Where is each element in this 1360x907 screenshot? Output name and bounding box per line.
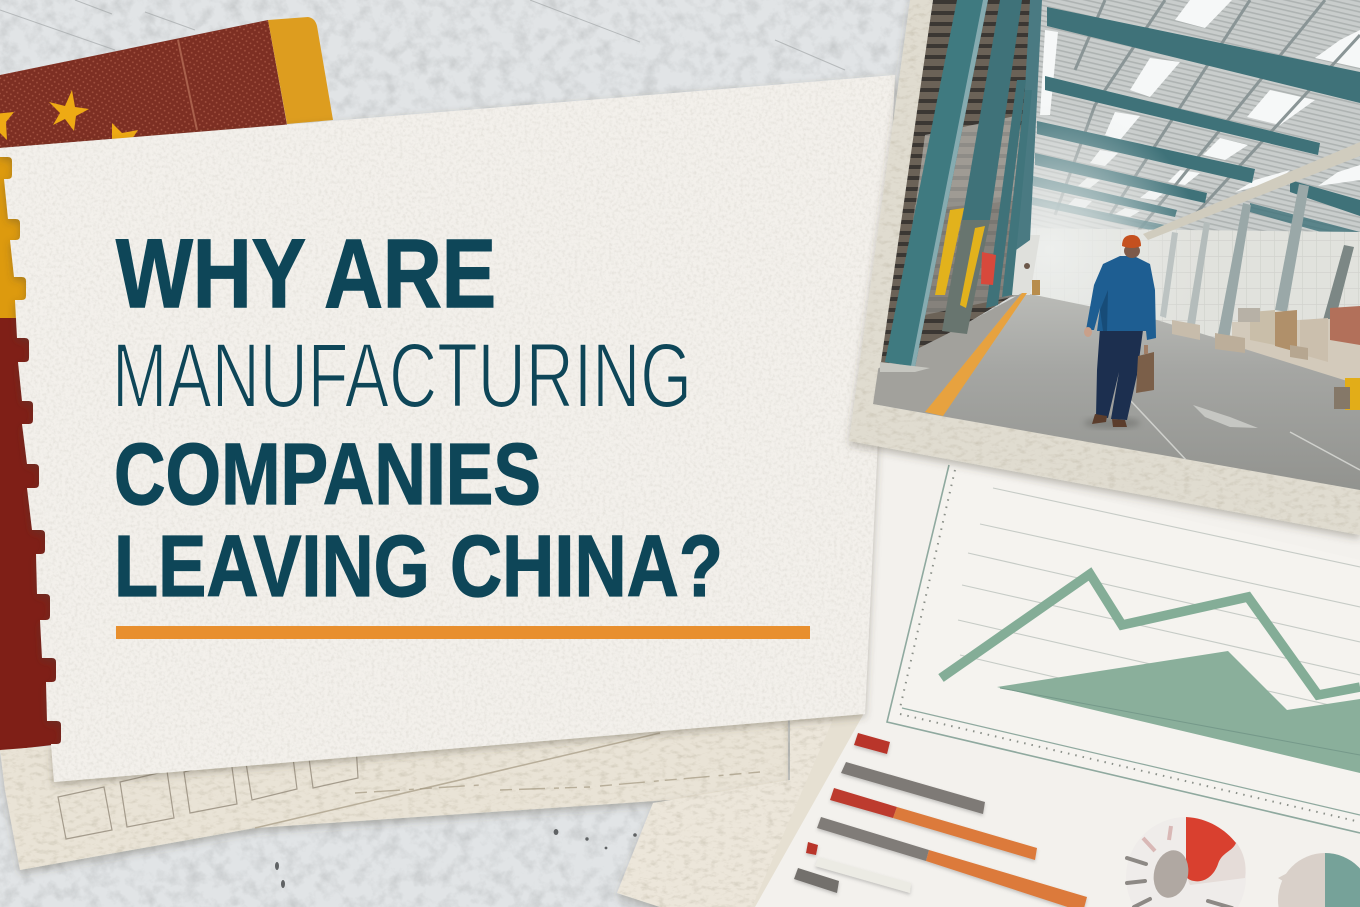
title line: manufacturing: MANUFACTURING (112, 325, 692, 427)
envelope paper under the main sheet (0, 690, 788, 870)
photo pallets and crates (1172, 306, 1360, 410)
title line: leaving china: LEAVING CHINA? (114, 518, 723, 615)
accent rule under title (116, 626, 810, 639)
photo: factory with a man walking, in a print frame (849, 0, 1360, 535)
photo ceiling (930, 0, 1360, 340)
icon: book spine band (268, 17, 333, 124)
title line: why are: WHY ARE (116, 219, 496, 328)
photo long cream beam (1143, 142, 1360, 240)
bar chart: slanted bars (794, 733, 1087, 907)
stack: torn flag strip behind the main paper (0, 150, 70, 751)
photo far wall with windows (1030, 228, 1360, 338)
hand (1084, 327, 1092, 337)
photo floor (860, 293, 1360, 500)
photo haze (1000, 118, 1184, 305)
pie chart: red gauge (1126, 817, 1246, 907)
briefcase (1136, 352, 1154, 393)
shoes (1092, 414, 1107, 424)
roof cross members (1055, 0, 1360, 235)
chart paper sheets (617, 440, 1360, 907)
panel: main torn paper sheet (0, 75, 895, 782)
title line: companies: COMPANIES (114, 426, 541, 523)
pie chart: teal and beige (1278, 853, 1360, 907)
jacket (1086, 256, 1156, 340)
head with red cap (1124, 247, 1140, 258)
postage stamp boxes (58, 745, 358, 839)
chart area: green mountain (997, 651, 1360, 773)
chart line: green trend (941, 574, 1360, 695)
photo left wall (873, 0, 1040, 412)
person walking away (1084, 235, 1156, 429)
title (112, 219, 723, 615)
photo yellow floor line (925, 293, 1027, 416)
icon: gold stars (0, 90, 138, 140)
book: red passport cover with stars (0, 17, 333, 148)
photo floor markings (1130, 400, 1360, 470)
trousers (1096, 328, 1143, 420)
roof beams (1032, 7, 1360, 243)
panel: line chart (887, 465, 1360, 833)
photo left columns (880, 0, 1042, 372)
photo right columns (1160, 184, 1354, 346)
